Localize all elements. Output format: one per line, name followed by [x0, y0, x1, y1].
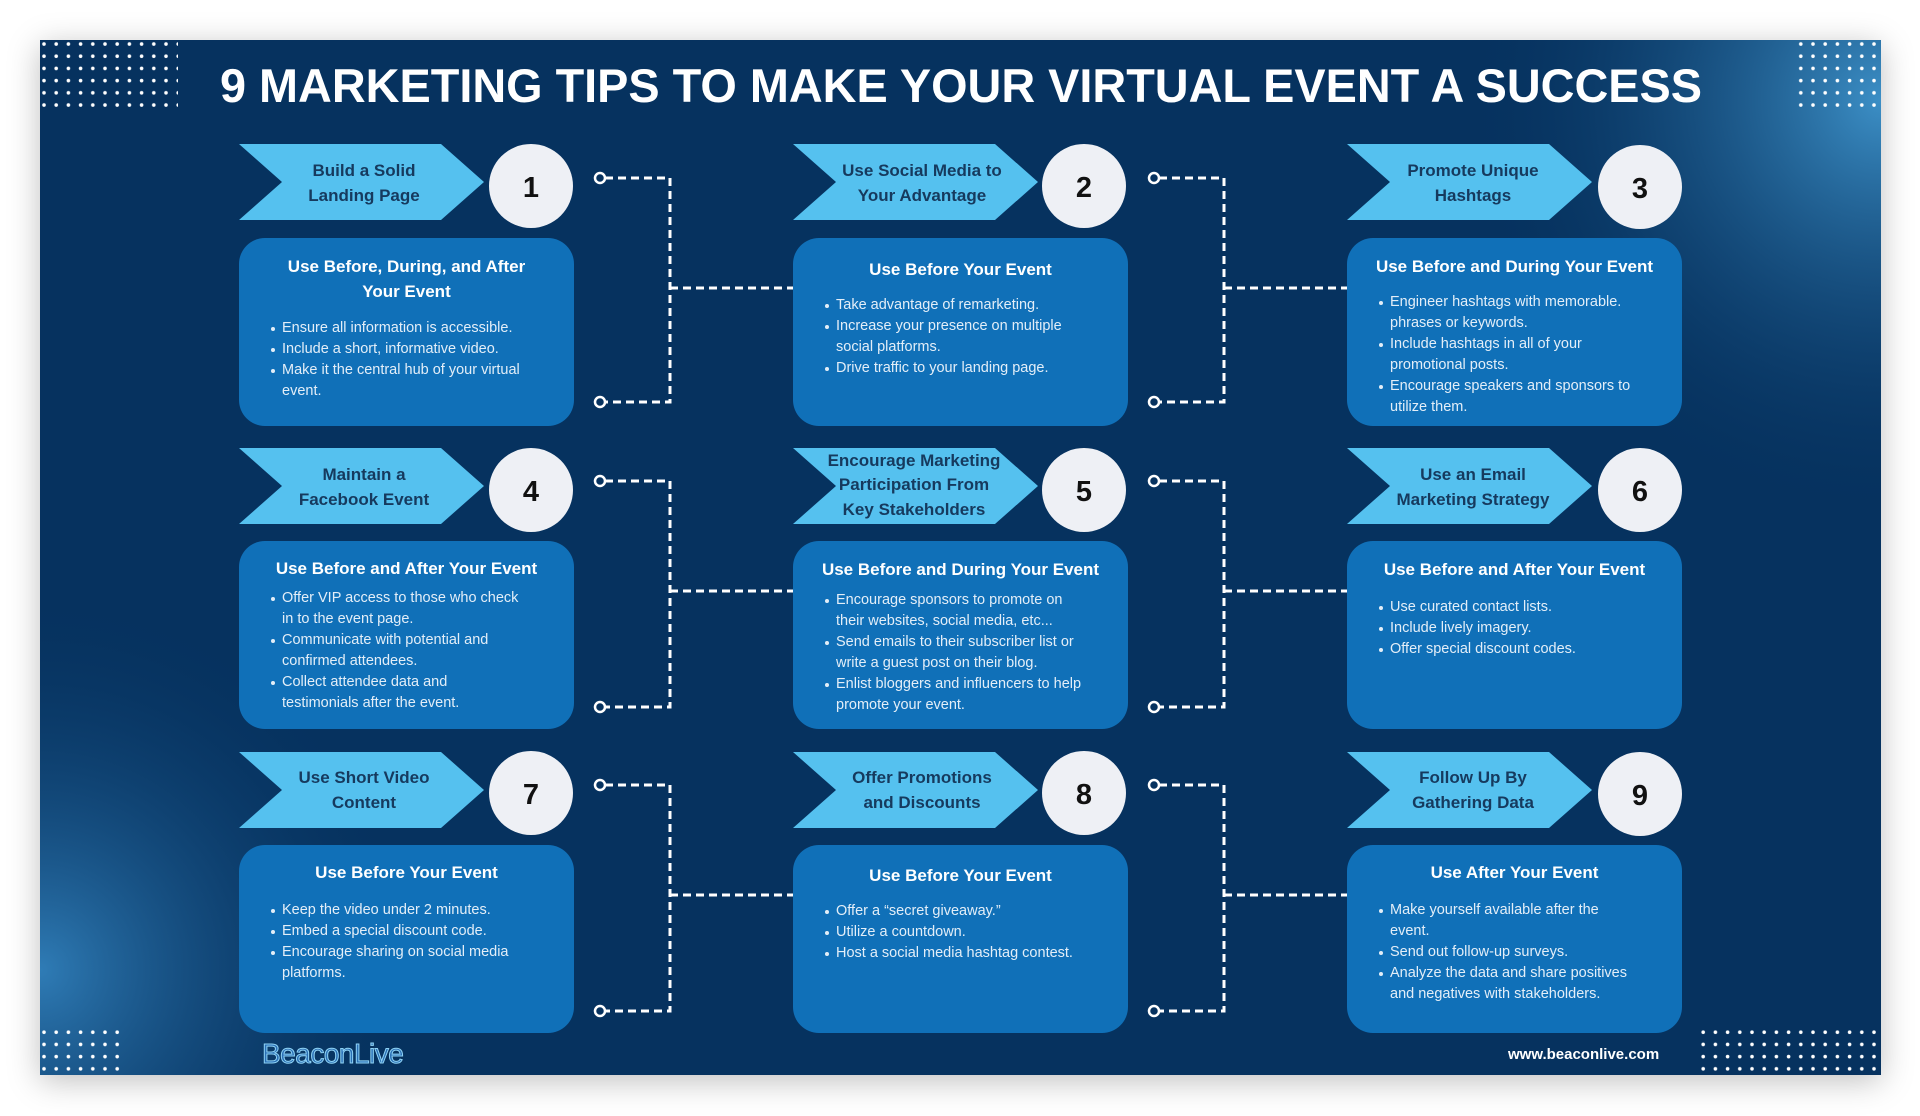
- box 7: Keep the video under 2 minutes.: [282, 902, 491, 918]
- box 5: promote your event.: [836, 696, 965, 712]
- logo: BeaconLive: BeaconLive: [262, 1038, 403, 1069]
- box 1: [239, 238, 574, 426]
- tip 1 header: Build a Solid: [313, 161, 415, 180]
- box 4: Use Before and After Your Event: [276, 559, 537, 578]
- box 4: testimonials after the event.: [282, 694, 459, 710]
- tip 9 header: Follow Up By: [1419, 768, 1527, 787]
- tip 5 header: Key Stakeholders: [843, 500, 985, 519]
- box 7: [239, 845, 574, 1033]
- box 2: Drive traffic to your landing page.: [836, 360, 1049, 376]
- box 4: Collect attendee data and: [282, 674, 447, 690]
- tip 9 header: [1347, 752, 1682, 836]
- tip 4 header: 4: [523, 476, 539, 508]
- box 8: Use Before Your Event: [869, 866, 1052, 885]
- tip 5 header: Participation From: [839, 475, 989, 494]
- box 2: Increase your presence on multiple: [836, 318, 1062, 334]
- tip 9 header: Gathering Data: [1412, 793, 1534, 812]
- box 9: [1347, 845, 1682, 1033]
- tip 6 header: Use an Email: [1420, 465, 1526, 484]
- box 6: Include lively imagery.: [1390, 620, 1532, 636]
- box 3: utilize them.: [1390, 398, 1467, 414]
- tip 5 header: 5: [1076, 476, 1092, 508]
- box 4: Offer VIP access to those who check: [282, 590, 518, 606]
- tip 1 header: 1: [523, 172, 539, 204]
- box 9: Use After Your Event: [1431, 863, 1598, 882]
- tip 2 header: Use Social Media to: [842, 161, 1002, 180]
- tip 4 header: Facebook Event: [299, 490, 430, 509]
- tip 6 header: 6: [1632, 476, 1648, 508]
- box 1: Your Event: [362, 282, 451, 300]
- tip 4 header: [239, 448, 573, 532]
- box 3: Use Before and During Your Event: [1376, 257, 1653, 276]
- tip 7 header: [239, 751, 573, 835]
- tip 5 header: [793, 448, 1126, 532]
- tip 8 header: and Discounts: [863, 793, 981, 812]
- website url: www.beaconlive.com: [1508, 1046, 1659, 1063]
- tip 4 header: Maintain a: [322, 465, 406, 484]
- box 5: Send emails to their subscriber list or: [836, 634, 1074, 650]
- box 3: [1347, 238, 1682, 426]
- tip 1 header: Landing Page: [308, 186, 420, 205]
- box 3: Engineer hashtags with memorable.: [1390, 294, 1621, 310]
- box 7: Use Before Your Event: [315, 863, 498, 882]
- tip 7 header: 7: [523, 779, 539, 811]
- box 9: Make yourself available after the: [1390, 902, 1599, 918]
- tip 8 header: [793, 751, 1126, 835]
- tip 5 header: Encourage Marketing: [828, 451, 1000, 470]
- box 6: Use Before and After Your Event: [1384, 560, 1645, 579]
- tip 3 header: [1347, 144, 1682, 229]
- box 7: Embed a special discount code.: [282, 922, 487, 938]
- box 5: Use Before and During Your Event: [822, 560, 1099, 579]
- box 9: and negatives with stakeholders.: [1390, 986, 1600, 1002]
- box 1: Ensure all information is accessible.: [282, 320, 512, 336]
- box 8: [793, 845, 1128, 1033]
- tip 2 header: [793, 144, 1126, 228]
- tip 3 header: Hashtags: [1435, 186, 1511, 205]
- box 8: Utilize a countdown.: [836, 924, 966, 940]
- tip 2 header: Your Advantage: [858, 186, 986, 205]
- box 9: Send out follow-up surveys.: [1390, 944, 1568, 960]
- box 5: their websites, social media, etc...: [836, 612, 1053, 628]
- tip 7 header: Use Short Video: [298, 768, 430, 787]
- tip 8 header: 8: [1076, 779, 1092, 811]
- box 4: confirmed attendees.: [282, 652, 417, 668]
- box 4: in to the event page.: [282, 610, 413, 626]
- box 1: Use Before, During, and After: [288, 257, 525, 276]
- tip 3 header: 3: [1632, 173, 1648, 205]
- box 9: event.: [1390, 922, 1430, 938]
- box 4: Communicate with potential and: [282, 632, 488, 648]
- tip 3 header: Promote Unique: [1407, 161, 1539, 180]
- box 5: write a guest post on their blog.: [836, 654, 1038, 670]
- tip 1 header: [239, 144, 573, 228]
- title: 9 MARKETING TIPS TO MAKE YOUR VIRTUAL EVENT A SUCCESS: [220, 59, 1702, 112]
- box 9: Analyze the data and share positives: [1390, 964, 1627, 980]
- box 2: Take advantage of remarketing.: [836, 296, 1039, 312]
- box 2: Use Before Your Event: [869, 260, 1052, 279]
- box 7: platforms.: [282, 964, 346, 980]
- box 5: Encourage sponsors to promote on: [836, 592, 1062, 608]
- tip 2 header: 2: [1076, 172, 1092, 204]
- box 2: social platforms.: [836, 338, 941, 354]
- box 3: Encourage speakers and sponsors to: [1390, 378, 1630, 394]
- box 3: promotional posts.: [1390, 356, 1508, 372]
- box 2: [793, 238, 1128, 426]
- box 1: Make it the central hub of your virtual: [282, 362, 520, 378]
- box 1: Include a short, informative video.: [282, 341, 499, 357]
- tip 7 header: Content: [332, 793, 396, 812]
- box 1: event.: [282, 383, 322, 399]
- box 8: Offer a “secret giveaway.”: [836, 902, 1001, 918]
- box 5: [793, 541, 1128, 729]
- box 8: Host a social media hashtag contest.: [836, 944, 1073, 960]
- box 3: Include hashtags in all of your: [1390, 336, 1582, 352]
- box 3: phrases or keywords.: [1390, 314, 1528, 330]
- box 4: [239, 541, 574, 729]
- tip 6 header: [1347, 448, 1682, 532]
- box 6: Use curated contact lists.: [1390, 598, 1552, 614]
- tip 6 header: Marketing Strategy: [1396, 490, 1550, 509]
- box 6: Offer special discount codes.: [1390, 640, 1576, 656]
- box 6: [1347, 541, 1682, 729]
- tip 8 header: Offer Promotions: [852, 768, 992, 787]
- tip 9 header: 9: [1632, 780, 1648, 812]
- box 5: Enlist bloggers and influencers to help: [836, 676, 1081, 692]
- box 7: Encourage sharing on social media: [282, 944, 508, 960]
